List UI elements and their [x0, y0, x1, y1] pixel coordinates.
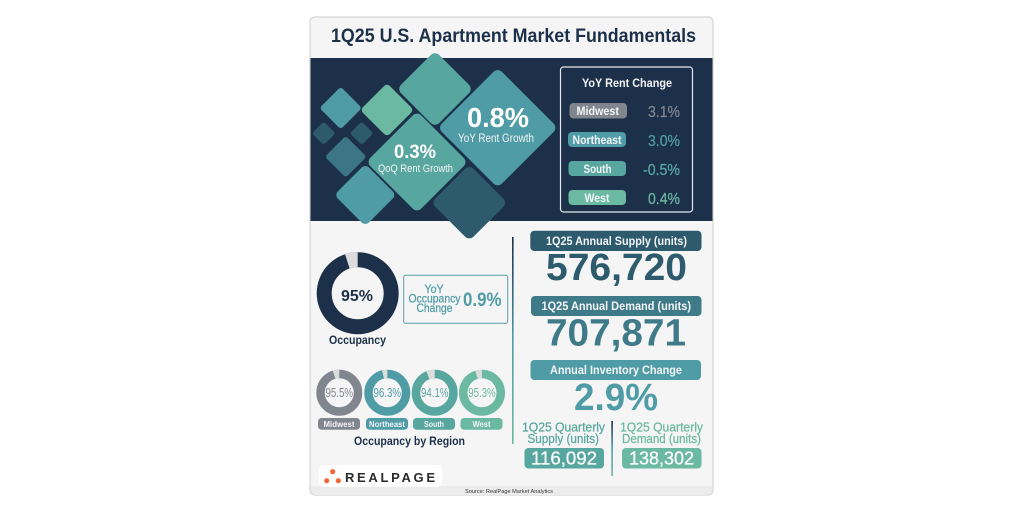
donut: Northeast — [365, 370, 410, 430]
quarterly demand — [620, 420, 703, 468]
row: West — [568, 190, 680, 208]
row: South: -0.5% — [643, 162, 680, 179]
donut: West — [459, 369, 505, 430]
row: Northeast: 3.0% — [648, 133, 680, 150]
quarterly supply: 1Q25 Quarterly — [522, 420, 605, 434]
decorative diamonds — [312, 51, 507, 241]
YoY occupancy change callout: Occupancy — [408, 292, 460, 306]
donut: West: 95.3% — [468, 386, 496, 400]
donut: South: South — [424, 419, 444, 429]
quarterly demand: 1Q25 Quarterly — [620, 420, 703, 434]
annual supply — [530, 231, 702, 289]
QoQ rent growth diamond: 0.3% — [394, 142, 436, 163]
hero band — [310, 58, 712, 221]
annual inventory change: 2.9% — [574, 377, 658, 419]
source note: Source: RealPage Market Analytics — [465, 489, 553, 495]
vertical divider — [512, 237, 514, 444]
donut: Northeast: Northeast — [369, 419, 405, 429]
occupancy donut: Occupancy — [329, 333, 386, 347]
occupancy donut — [315, 251, 400, 347]
quarterly demand: 138,302 — [629, 448, 694, 468]
logo: RealPage — [319, 465, 442, 487]
occupancy donut: 95% — [341, 288, 373, 305]
QoQ rent growth diamond — [366, 111, 468, 213]
YoY occupancy change callout: Change — [416, 301, 453, 315]
quarterly supply: 116,092 — [531, 448, 597, 468]
panel: YoY rent change — [560, 67, 692, 212]
row: Midwest — [570, 103, 680, 121]
annual demand: 1Q25 Annual Demand (units) — [542, 299, 691, 313]
quarterly supply — [522, 420, 605, 468]
quarterly divider — [611, 421, 613, 476]
YoY rent growth diamond — [438, 68, 558, 188]
heading: YoY Rent Change — [582, 76, 672, 90]
row: West: 0.4% — [648, 191, 680, 208]
row: South: South — [584, 164, 612, 176]
quarterly supply: Supply (units) — [528, 431, 599, 446]
occupancy by region heading: Occupancy by Region — [354, 434, 465, 448]
row: Northeast — [568, 132, 680, 150]
donut: Midwest: 95.5% — [326, 386, 353, 400]
YoY rent growth diamond: 0.8% — [467, 102, 529, 133]
donut: Midwest: Midwest — [324, 419, 355, 429]
QoQ rent growth diamond: QoQ Rent Growth — [378, 163, 453, 175]
logo: RealPage: REALPAGE — [345, 470, 435, 485]
quarterly demand: Demand (units) — [622, 431, 701, 446]
annual inventory change — [530, 360, 701, 419]
title: 1Q25 U.S. Apartment Market Fundamentals — [331, 26, 696, 47]
YoY occupancy change callout: YoY — [424, 282, 444, 296]
donut: Northeast: 96.3% — [374, 386, 401, 400]
donut: West: West — [472, 419, 491, 429]
card background — [310, 17, 713, 495]
row: South — [568, 161, 680, 179]
annual supply: 1Q25 Annual Supply (units) — [546, 234, 687, 248]
annual supply: 576,720 — [546, 247, 687, 289]
row: Northeast: Northeast — [572, 135, 622, 147]
YoY occupancy change callout — [404, 275, 508, 323]
annual demand — [531, 296, 702, 354]
donut: South: 94.1% — [421, 386, 448, 400]
annual inventory change: Annual Inventory Change — [550, 363, 682, 377]
YoY occupancy change callout: 0.9% — [463, 290, 502, 311]
donut: Midwest — [316, 369, 363, 430]
YoY rent growth diamond: YoY Rent Growth — [458, 133, 534, 145]
donut: South — [410, 368, 459, 430]
row: West: West — [584, 193, 610, 205]
footer band — [311, 486, 712, 495]
row: Midwest: Midwest — [576, 106, 619, 118]
row: Midwest: 3.1% — [648, 104, 680, 121]
annual demand: 707,871 — [546, 312, 686, 354]
